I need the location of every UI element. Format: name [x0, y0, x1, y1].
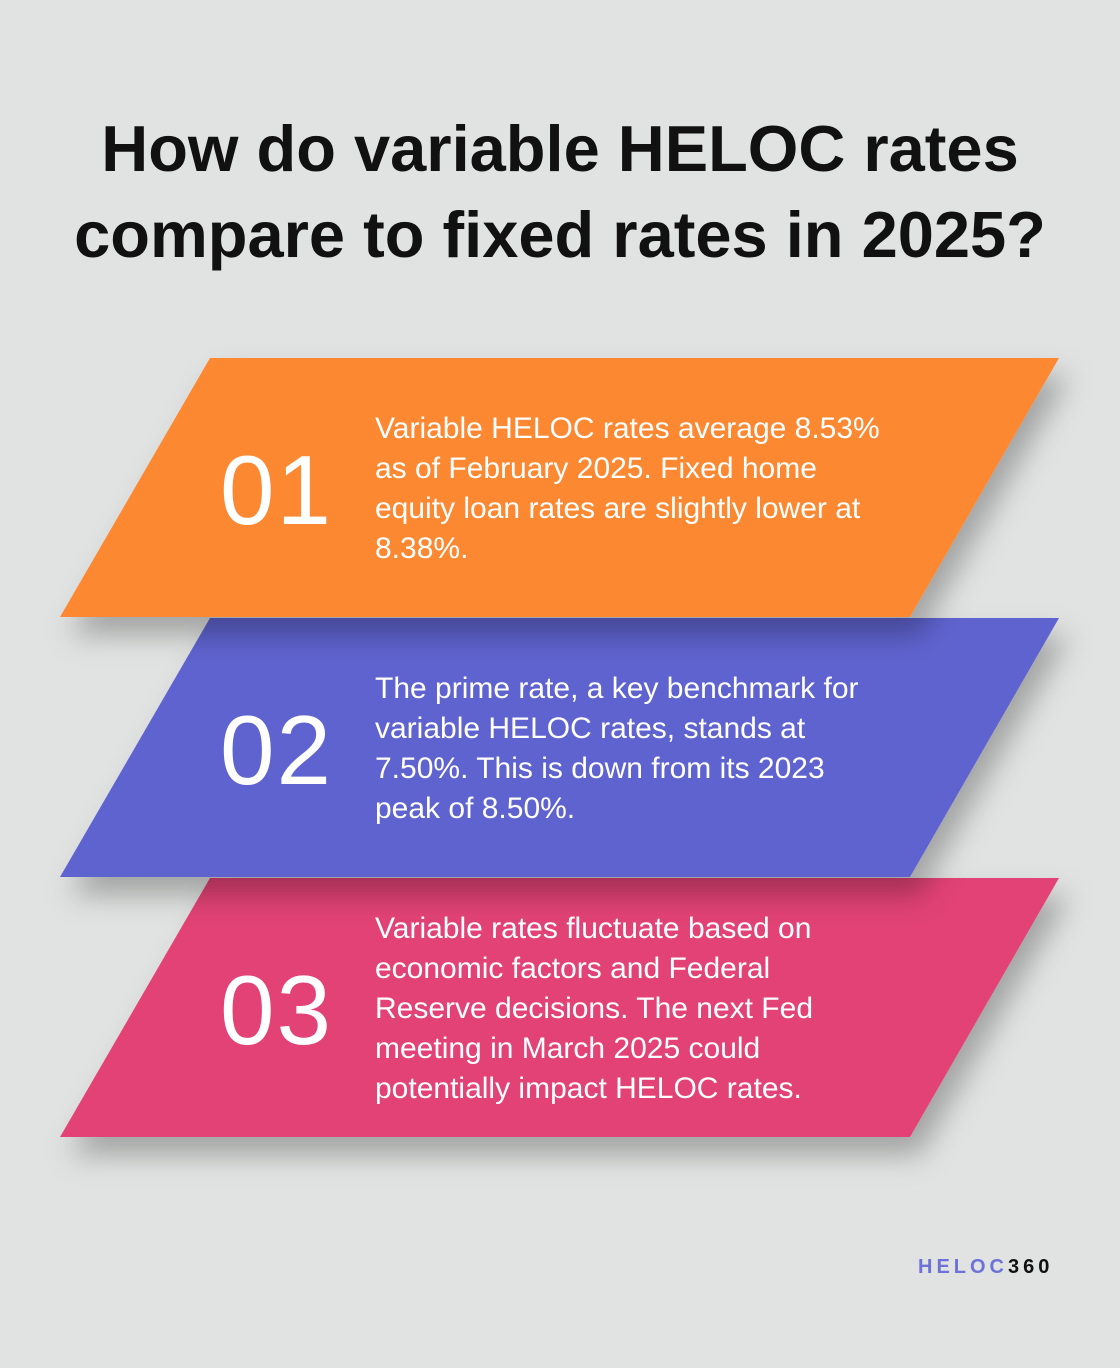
panel 02 text: The prime rate, a key benchmark for [375, 672, 859, 705]
panel 02 text: peak of 8.50%. [375, 792, 575, 825]
panel 01 text: as of February 2025. Fixed home [375, 452, 817, 485]
panel 03 text: meeting in March 2025 could [375, 1032, 760, 1065]
panel shape 01 [60, 358, 1059, 617]
panel 02 text [375, 672, 859, 825]
panel 03 text: potentially impact HELOC rates. [375, 1072, 802, 1105]
panel 03 text [375, 912, 813, 1105]
panel shape 03 [60, 878, 1059, 1137]
panel 01 text: Variable HELOC rates average 8.53% [375, 412, 880, 445]
panel shape 02 [60, 618, 1059, 877]
title: compare to fixed rates in 2025? [74, 198, 1046, 271]
panel 01 text: 8.38%. [375, 532, 468, 565]
panel 03 text: Reserve decisions. The next Fed [375, 992, 813, 1025]
panel 02 number: 02 [220, 695, 333, 805]
title [74, 112, 1046, 271]
panel 03 number: 03 [220, 955, 333, 1065]
panel 01 text: equity loan rates are slightly lower at [375, 492, 860, 525]
panel 01 text [375, 412, 880, 565]
panel 03 text: economic factors and Federal [375, 952, 770, 985]
panel 02 text: 7.50%. This is down from its 2023 [375, 752, 825, 785]
title: How do variable HELOC rates [101, 112, 1019, 185]
logo: HELOC360 [918, 1256, 1053, 1278]
panel 03 text: Variable rates fluctuate based on [375, 912, 811, 945]
panel 01 number: 01 [220, 435, 333, 545]
panel 02 text: variable HELOC rates, stands at [375, 712, 805, 745]
